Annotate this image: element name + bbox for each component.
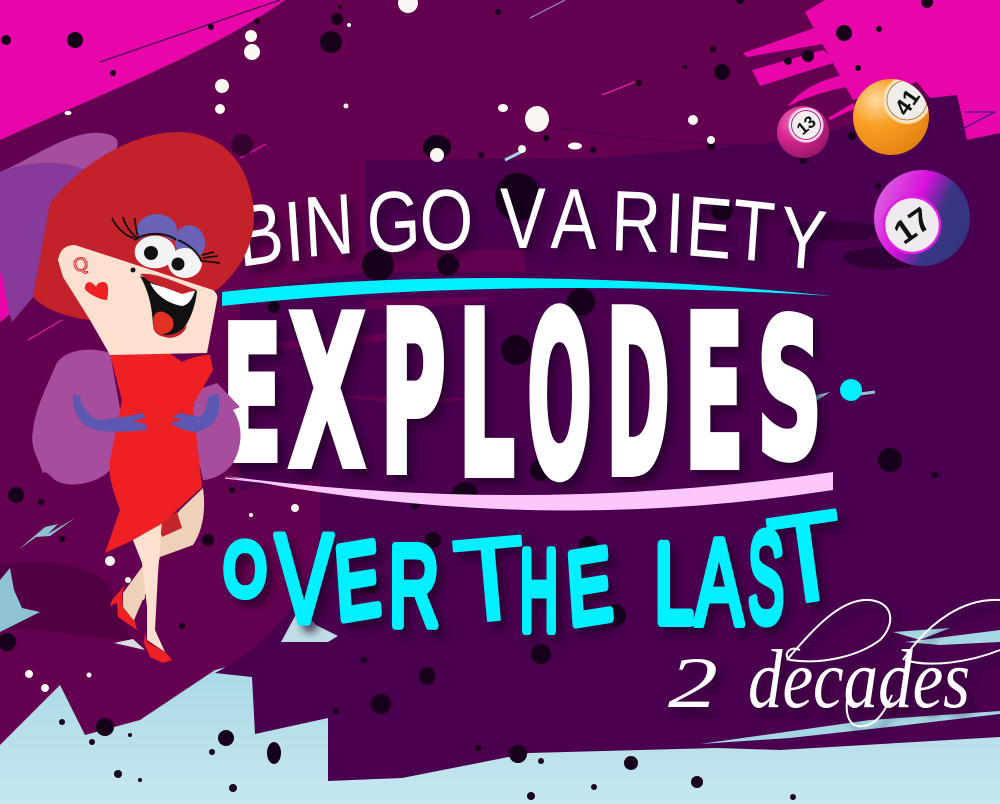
title line: OVER THE LAST: O	[224, 528, 266, 611]
title line: EXPLODES	[222, 264, 822, 529]
bingo ball 41: 41	[889, 84, 925, 120]
title line: EXPLODES: O	[527, 266, 592, 529]
back leg	[123, 488, 204, 623]
title line: BINGO VARIETY: BINGO VARIETY	[232, 171, 830, 290]
playing-card mark	[71, 253, 108, 300]
feather boa	[32, 350, 240, 485]
shoe reflection	[114, 639, 145, 650]
background: light blue lower band	[0, 640, 1000, 804]
face	[58, 245, 217, 355]
bingo ball shadows	[785, 221, 927, 269]
title line: OVER THE LAST: T	[449, 511, 532, 649]
cyan dot	[840, 379, 862, 401]
bingo ball 13: 13	[793, 112, 820, 139]
title line: EXPLODES: L	[458, 265, 515, 528]
pink swoosh	[225, 472, 833, 510]
title line: EXPLODES: E	[222, 287, 282, 503]
bingo ball 13	[777, 106, 829, 158]
title line: OVER THE LAST: E	[560, 529, 616, 647]
arms and gloves	[73, 393, 219, 432]
cyan swoosh	[222, 278, 832, 306]
title line: OVER THE LAST: E	[328, 523, 384, 643]
red hair	[33, 132, 254, 320]
infographic canvas: S	[757, 280, 822, 501]
title line: OVER THE LAST	[224, 483, 853, 655]
title line: OVER THE LAST: H	[520, 528, 558, 655]
eye shadow	[137, 214, 209, 262]
background: magenta accent left edge	[0, 270, 32, 322]
background: shadow pool	[0, 562, 135, 640]
title line: EXPLODES: P	[380, 266, 446, 524]
red dress	[105, 348, 213, 553]
cape: darker fold	[0, 163, 85, 322]
character: queen of hearts lady	[0, 132, 254, 663]
background: magenta brush top right	[743, 0, 1000, 140]
bingo ball 41	[853, 77, 930, 155]
background: dark purple brush area	[215, 95, 1000, 781]
bingo ball 17	[874, 170, 970, 266]
script flourishes on the letter d	[787, 600, 1000, 726]
title line: OVER THE LAST: A	[695, 514, 743, 650]
title line: EXPLODES: X	[289, 273, 365, 515]
background: plum streaks behind title	[240, 296, 500, 520]
front leg	[133, 522, 165, 652]
cape: purple back hair	[0, 133, 118, 322]
title line: EXPLODES: E	[684, 271, 744, 516]
playing-card mark: Q	[71, 253, 91, 277]
title line: EXPLODES: D	[606, 264, 670, 527]
subtitle: 2 decades	[668, 600, 1000, 726]
title line: OVER THE LAST: V	[275, 508, 333, 649]
mouth	[140, 274, 197, 338]
beauty mark	[130, 268, 136, 272]
bingo ball 17: 17	[887, 200, 938, 251]
title line: OVER THE LAST: R	[389, 523, 439, 650]
title line: OVER THE LAST: T	[760, 483, 853, 633]
title line: OVER THE LAST: L	[655, 521, 693, 646]
background: blue sliver lower right	[700, 711, 1000, 744]
shoes	[110, 585, 172, 663]
background: magenta brush top left	[0, 0, 285, 140]
ink splatter: white drops	[25, 0, 715, 692]
background: thin streaks	[28, 0, 995, 482]
dress inner shadow	[162, 512, 182, 537]
subtitle: 2 decades: 2	[668, 643, 718, 723]
title line: OVER THE LAST: S	[748, 507, 784, 650]
eyes	[112, 217, 220, 278]
background: blue shards	[0, 392, 1000, 645]
